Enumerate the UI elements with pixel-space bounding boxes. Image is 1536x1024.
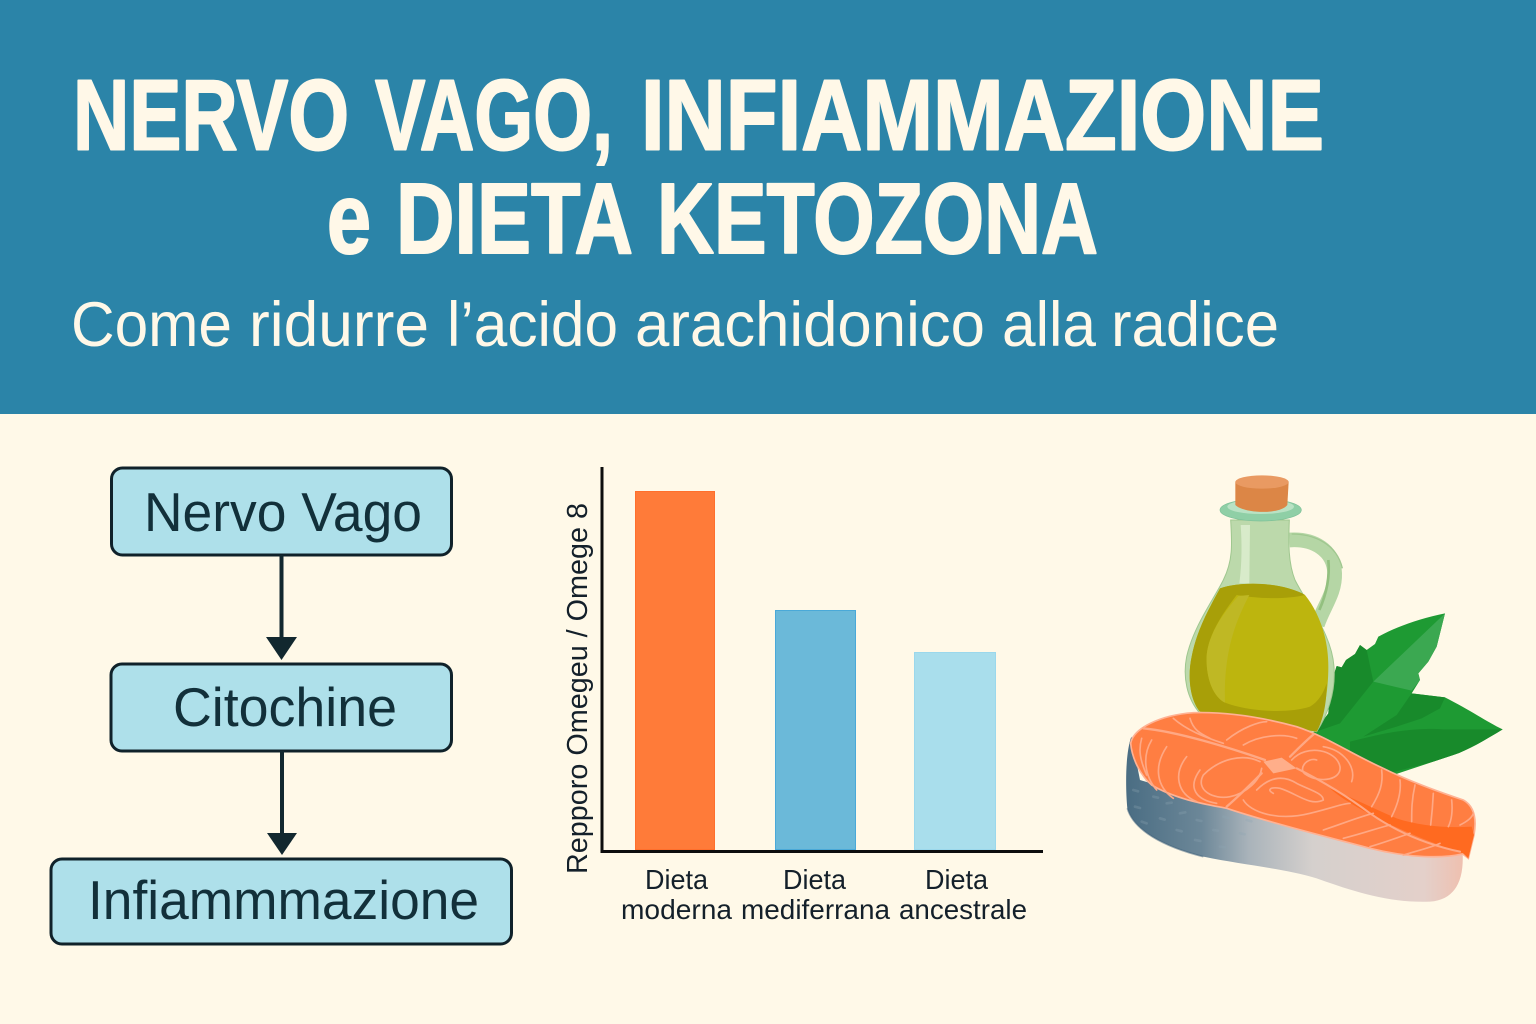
box: Citochine: Citochine (173, 676, 397, 738)
icon: olive oil bottle (1185, 520, 1342, 732)
title line 2 (327, 163, 1098, 275)
x labels: ancestrale (899, 894, 1027, 925)
title line 2: DIETA (396, 163, 633, 275)
subtitle: alla (1002, 290, 1097, 360)
arrow: Nervo Vago to Citochine (266, 555, 297, 660)
box: Citochine (111, 664, 452, 751)
x labels: Dieta (925, 864, 988, 895)
bar: Dieta mediferrana (776, 610, 856, 850)
x labels (621, 864, 1027, 925)
bar chart (562, 467, 1043, 925)
subtitle: l’acido (447, 290, 618, 360)
subtitle: radice (1111, 290, 1279, 360)
bar: Dieta moderna (636, 492, 714, 850)
box: Infiammmazione (51, 859, 512, 944)
title line 2: e (327, 163, 371, 275)
box: Infiammmazione: Infiammmazione (88, 869, 479, 931)
axes (602, 467, 1043, 852)
title line 1: INFIAMMAZIONE (641, 60, 1324, 172)
icon: salmon steak (1126, 713, 1475, 902)
subtitle (71, 290, 1279, 360)
icon: bottle collar and cork (1220, 475, 1301, 521)
x labels: Dieta (783, 864, 846, 895)
header banner (0, 0, 1536, 414)
bar: Dieta ancestrale (914, 652, 996, 850)
box: Nervo Vago (112, 468, 452, 555)
flow diagram (51, 468, 512, 944)
subtitle: arachidonico (635, 290, 985, 360)
subtitle: Come (71, 290, 232, 360)
box: Nervo Vago: Nervo Vago (144, 481, 422, 543)
icon: basil leaves (1310, 613, 1503, 777)
subtitle: ridurre (249, 290, 429, 360)
title line 2: KETOZONA (657, 163, 1098, 275)
arrow: Citochine to Infiammazione (267, 751, 297, 855)
x labels: moderna (621, 894, 732, 925)
y axis title: Repporo Omegeu / Omege 8 (562, 503, 594, 874)
food illustration (1126, 475, 1503, 902)
title line 1: NERVO (73, 60, 349, 172)
x labels: Dieta (645, 864, 708, 895)
title line 1: VAGO, (375, 60, 613, 172)
title line 1 (73, 60, 1324, 172)
x labels: mediferrana (741, 894, 890, 925)
